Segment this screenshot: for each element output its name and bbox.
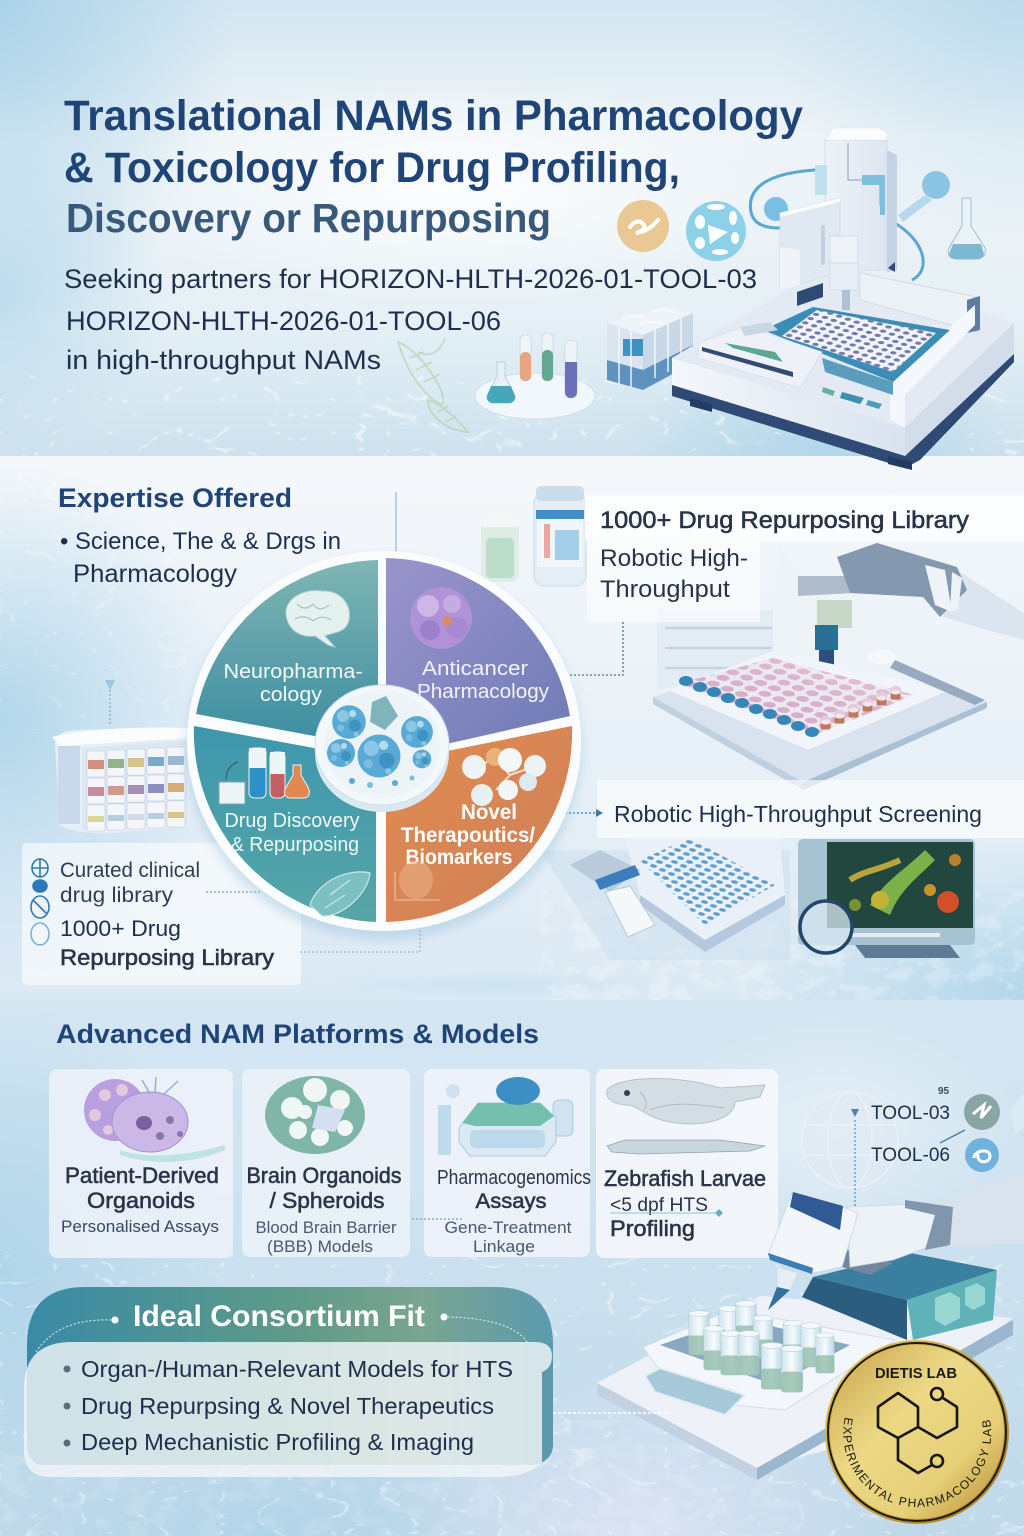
icon: petri dish with spheroids [315,685,449,812]
illustration: robotic plate screening [653,543,1024,790]
card: patient-derived organoids [49,1069,233,1258]
icon: tan circle badge [617,200,669,252]
icon: green spheroid [265,1076,365,1154]
segment: drug discovery and repurposing [194,726,376,922]
icon: tool-03 badge [964,1094,1000,1130]
callout: drug repurposing library: Robotic High- [600,545,748,572]
badge: Dietis Lab gold seal [825,1340,1009,1524]
panel: curated clinical drug library: 1000+ Drug [60,916,181,941]
card: patient-derived organoids: Personalised Assays [61,1217,219,1236]
icon: brain [286,590,349,647]
connector: library dotted line [567,622,623,675]
panel: expertise offered text: • Science, The & & Drgs in [60,528,341,555]
panel: ideal consortium fit [24,1287,553,1477]
subtitle: in high-throughput NAMs [66,345,381,375]
subtitle [64,264,757,375]
icon: medicine jars [481,486,586,586]
card: zebrafish larvae: <5 dpf HTS [610,1195,708,1216]
icon: DNA strand [398,338,468,432]
tool labels: 95 [938,1086,950,1097]
panel: curated clinical drug library: drug library [60,884,174,907]
panel: curated clinical drug library: Repurposing Library [60,945,274,970]
icon: drug box pack [607,307,693,390]
segment: drug discovery and repurposing: Drug Discovery [224,810,360,832]
card: pharmacogenomics assays: Gene-Treatment [444,1218,572,1237]
segment: novel therapeutics and biomarkers: Therapoutics/ [401,824,535,847]
card: patient-derived organoids: Patient-Derived [65,1163,219,1188]
connector: dashed link to device [553,1412,670,1414]
card: brain organoids: Brain Organoids [246,1163,402,1188]
icon: lab glassware [219,748,309,804]
card: patient-derived organoids: Organoids [87,1188,195,1213]
tool labels: TOOL-03 [871,1103,950,1124]
icon: pale globe [802,1092,898,1188]
illustration: plate reader and notes [540,838,790,960]
card: brain organoids: (BBB) Models [267,1237,373,1256]
panel: expertise offered text: Expertise Offered [58,483,292,513]
panel: curated clinical drug library: Curated clinical [60,859,200,882]
icon: leaf tissue [310,872,370,916]
icon: zebrafish [607,1078,765,1154]
heading: advanced NAM platforms: Advanced NAM Platforms & Models [56,1019,539,1049]
segment: neuropharmacology: cology [260,684,322,706]
panel: ideal consortium fit: Ideal Consortium Fit [133,1300,425,1333]
title [64,92,803,241]
segment: novel therapeutics and biomarkers: Biomarkers [406,846,512,869]
card: pharmacogenomics assays: Linkage [473,1237,535,1256]
decoration: header dots [36,1317,527,1352]
panel: ideal consortium fit: Drug Repurpsing & Novel Therapeutics [81,1393,494,1419]
icon: tool-06 badge [965,1138,999,1172]
segment: anticancer pharmacology [386,558,570,745]
icon: DNA helix [31,859,49,945]
illustration: imaging monitor [798,839,975,958]
card: zebrafish larvae: Profiling [610,1216,695,1241]
icon: tumour cell [410,587,472,649]
connector: card link [412,1218,462,1220]
chart: expertise wheel [186,551,582,940]
panel: curated clinical drug library [22,843,301,985]
illustration: drug shelf [52,727,190,833]
callout: drug repurposing library [585,495,1024,622]
icon: purple organoid [84,1077,225,1162]
tool labels: TOOL-06 [871,1145,950,1166]
panel: ideal consortium fit: Deep Mechanistic Profiling & Imaging [81,1429,474,1455]
card: brain organoids: Blood Brain Barrier [256,1218,397,1237]
icon: organ chip device [438,1077,573,1156]
panel: ideal consortium fit: Organ-/Human-Relevant Models for HTS [81,1356,513,1382]
icon: molecule [878,1388,957,1473]
segment: anticancer pharmacology: Pharmacology [417,681,549,703]
subtitle: Seeking partners for HORIZON-HLTH-2026-01-TOOL-03 [64,264,757,294]
segment: neuropharmacology [196,560,378,738]
callout: drug repurposing library: 1000+ Drug Repurposing Library [600,507,969,534]
segment: drug discovery and repurposing: & Repurposing [231,834,359,856]
card: brain organoids: / Spheroids [270,1188,384,1213]
card: brain organoids [242,1069,410,1257]
panel: expertise offered text [58,483,341,588]
callout: drug repurposing library: Throughput [600,576,730,603]
title: Discovery or Repurposing [66,195,551,241]
card: zebrafish larvae [596,1069,778,1258]
illustration: robotic dispenser with vials [597,1170,1024,1480]
badge: Dietis Lab gold seal: DIETIS LAB [875,1365,957,1382]
icon: molecule network [462,748,546,806]
segment: anticancer pharmacology: Anticancer [422,658,528,680]
tool labels [851,1086,1024,1206]
title: Translational NAMs in Pharmacology [64,92,803,140]
panel: expertise offered text: Pharmacology [73,560,238,588]
card: pharmacogenomics assays: Assays [476,1190,546,1213]
icon: blue network circle [686,201,746,261]
card: pharmacogenomics assays: Pharmacogenomics [437,1167,591,1189]
callout: robotic high-throughput screening [565,780,1024,838]
illustration: high-throughput robot [672,128,1014,470]
badge: Dietis Lab gold seal: EXPERIMENTAL PHARMACOLOGY LAB [843,1418,992,1508]
segment: novel therapeutics and biomarkers: Novel [461,801,517,824]
segment: novel therapeutics and biomarkers [386,726,572,922]
card: zebrafish larvae: Zebrafish Larvae [604,1166,766,1191]
connector: vertical guide lines [105,492,420,952]
title: & Toxicology for Drug Profiling, [64,144,680,192]
callout: robotic high-throughput screening: Robotic High-Throughput Screening [614,801,982,827]
card: pharmacogenomics assays [424,1069,591,1257]
icon: test tubes on tray [475,333,595,419]
subtitle: HORIZON-HLTH-2026-01-TOOL-06 [66,306,501,336]
segment: neuropharmacology: Neuropharma- [224,661,362,683]
